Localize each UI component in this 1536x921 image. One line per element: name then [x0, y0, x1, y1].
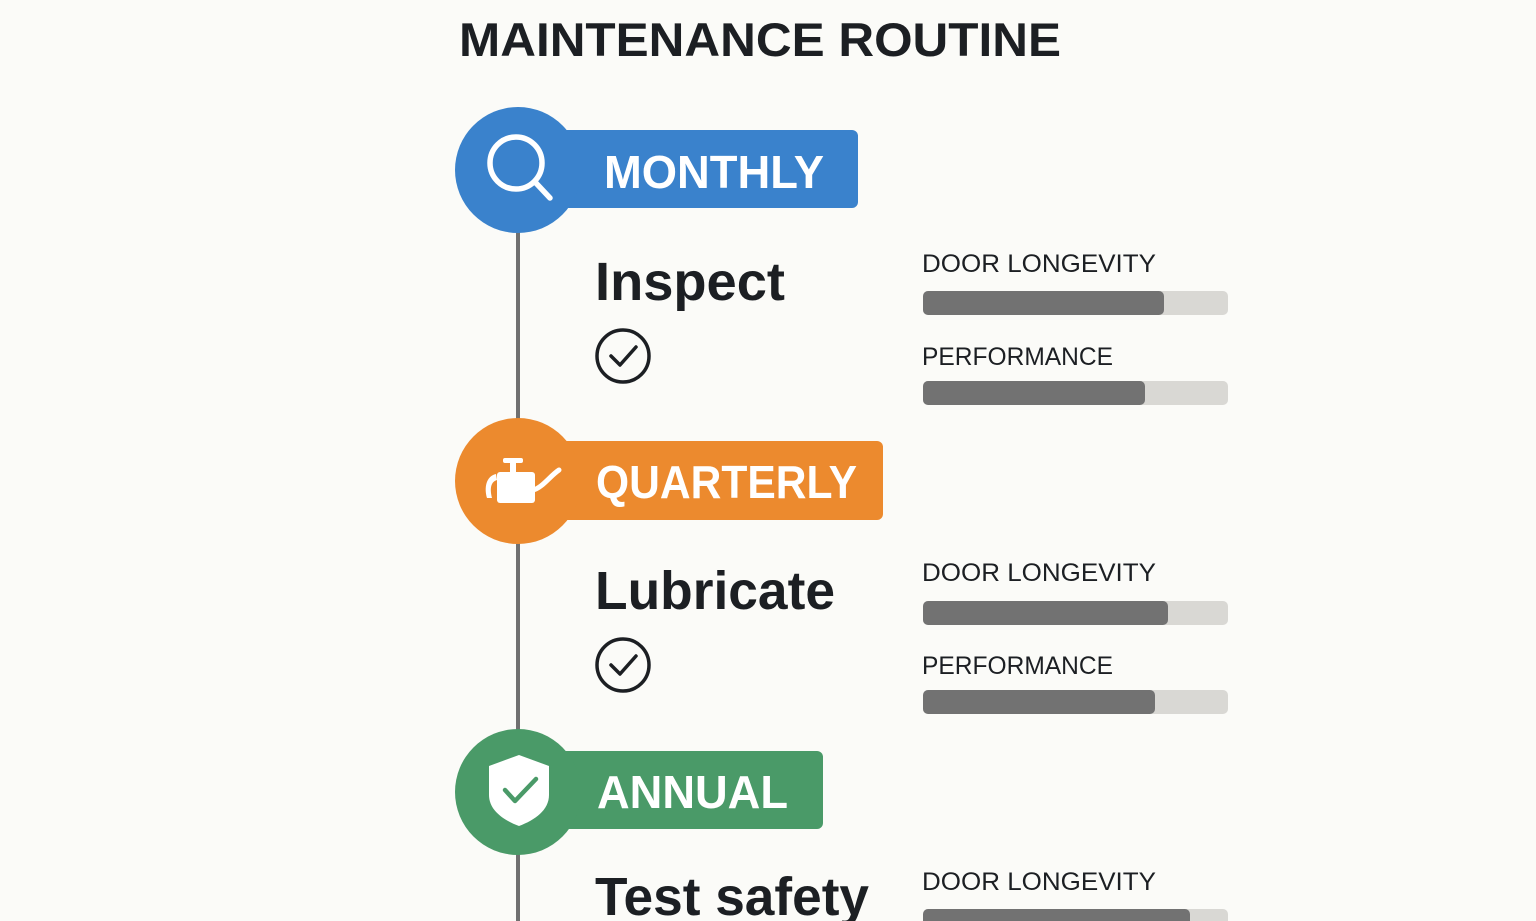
bar: performance: [922, 343, 1228, 405]
section: annual: [455, 729, 1228, 921]
banner: quarterly: [455, 418, 883, 544]
icon: magnifier: [490, 137, 550, 198]
banner: monthly: MONTHLY: [604, 146, 824, 198]
banner: annual: [455, 729, 823, 855]
bar: performance: [922, 652, 1228, 714]
icon: check circle: [597, 330, 649, 382]
task: lubricate: Lubricate: [595, 561, 835, 621]
banner: annual: ANNUAL: [597, 766, 788, 818]
bar: performance: PERFORMANCE: [922, 652, 1113, 680]
section: monthly: [455, 107, 1228, 405]
bar: door longevity: DOOR LONGEVITY: [922, 250, 1156, 278]
bar: door longevity: [922, 250, 1228, 315]
title: MAINTENANCE ROUTINE: [459, 13, 1061, 66]
icon: check circle: [597, 639, 649, 691]
icon: shield: [489, 755, 549, 826]
bar: performance: PERFORMANCE: [922, 343, 1113, 371]
task: inspect: Inspect: [595, 252, 785, 312]
bar: door longevity: [922, 559, 1228, 625]
icon: oil can: [486, 458, 559, 503]
bar: door longevity: [922, 868, 1228, 921]
bar: door longevity: DOOR LONGEVITY: [922, 559, 1156, 587]
timeline line: [516, 200, 520, 921]
bar: door longevity: DOOR LONGEVITY: [922, 868, 1156, 896]
section: quarterly: [455, 418, 1228, 714]
banner: monthly: [455, 107, 858, 233]
banner: quarterly: QUARTERLY: [596, 456, 857, 508]
